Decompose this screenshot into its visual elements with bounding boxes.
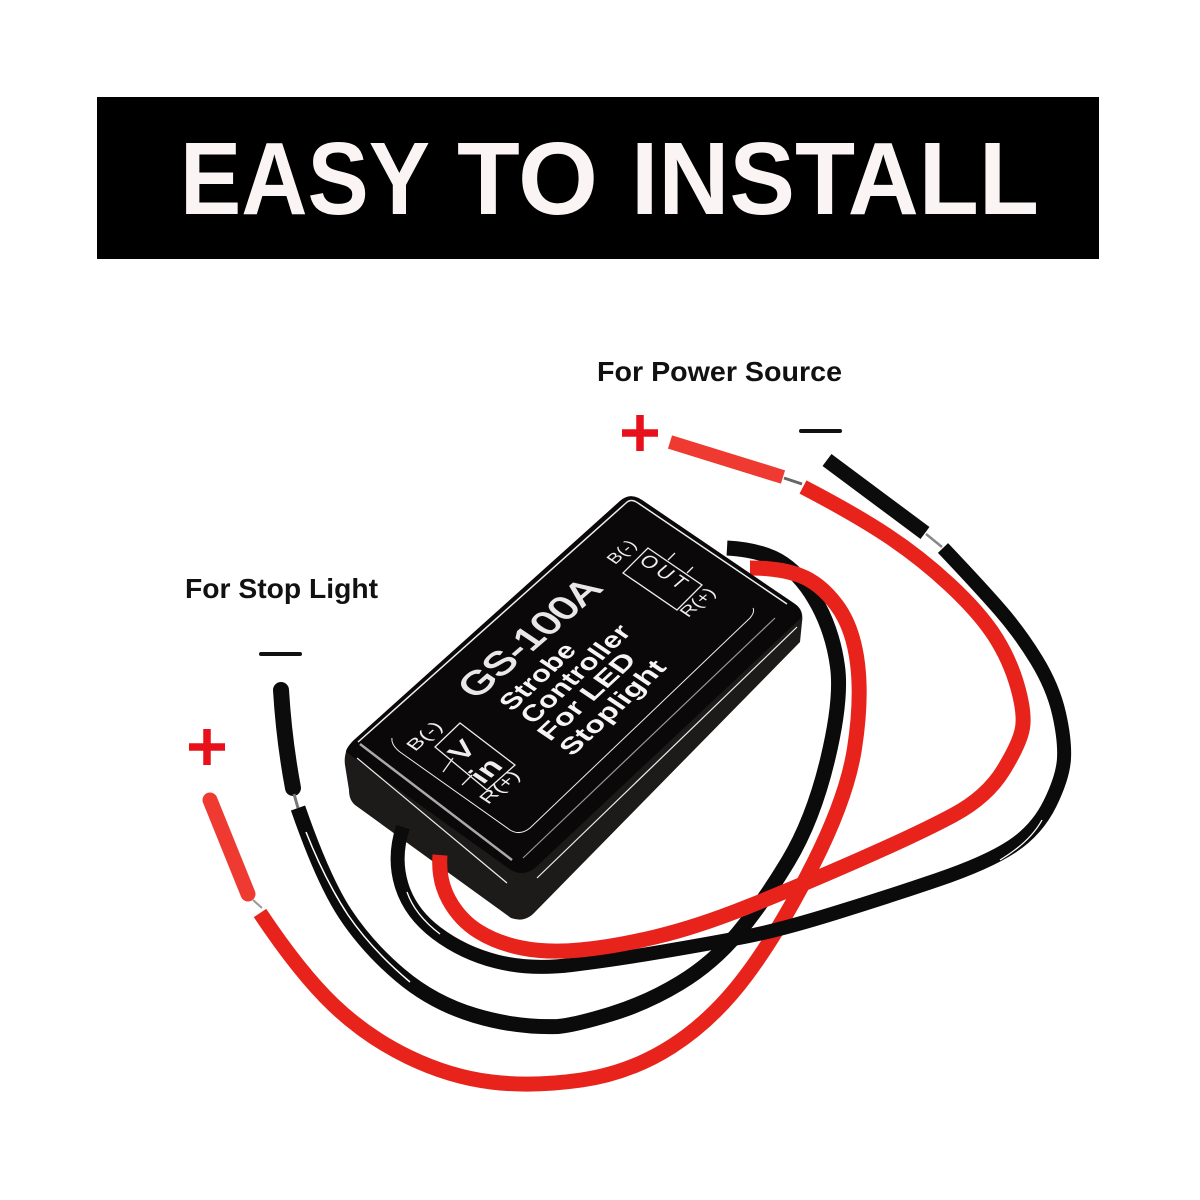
power source red wire xyxy=(440,442,1023,951)
V in terminal diagram: B(-) xyxy=(402,718,447,754)
OUT terminal diagram: OUT xyxy=(634,551,692,593)
OUT terminal diagram: B(-) xyxy=(603,537,641,567)
icon: plus sign power source xyxy=(622,415,658,451)
title banner: TO xyxy=(457,121,598,236)
icon: plus sign stop light xyxy=(189,729,225,765)
module text: Controller: Controller xyxy=(513,619,637,728)
OUT terminal diagram xyxy=(603,537,720,620)
label: for stop light: For Stop Light xyxy=(185,573,378,604)
module text: Stoplight: Stoplight xyxy=(552,654,673,760)
V in terminal diagram: in xyxy=(462,753,509,788)
module top face xyxy=(346,496,801,873)
V in terminal diagram: V xyxy=(442,735,483,765)
stop light red wire xyxy=(210,568,859,1084)
title banner: EASY xyxy=(180,121,430,236)
OUT terminal diagram: R(+) xyxy=(676,585,720,620)
label: for power source: For Power Source xyxy=(597,356,842,387)
stop light black wire xyxy=(281,548,839,1027)
icon: minus sign power source xyxy=(799,429,842,433)
module heading GS-100A: GS-100A xyxy=(448,571,610,704)
strobe controller module xyxy=(345,496,802,920)
V in terminal diagram: R(+) xyxy=(475,767,525,807)
V in terminal diagram xyxy=(402,718,525,807)
icon: minus sign stop light xyxy=(259,652,302,656)
title banner xyxy=(97,97,1099,259)
module edge highlights xyxy=(357,500,797,883)
title banner: INSTALL xyxy=(631,121,1039,236)
module body silhouette xyxy=(345,496,802,920)
power source black wire xyxy=(398,460,1064,967)
module text: For LED: For LED xyxy=(530,647,643,745)
module text: Strobe: Strobe xyxy=(492,637,583,715)
